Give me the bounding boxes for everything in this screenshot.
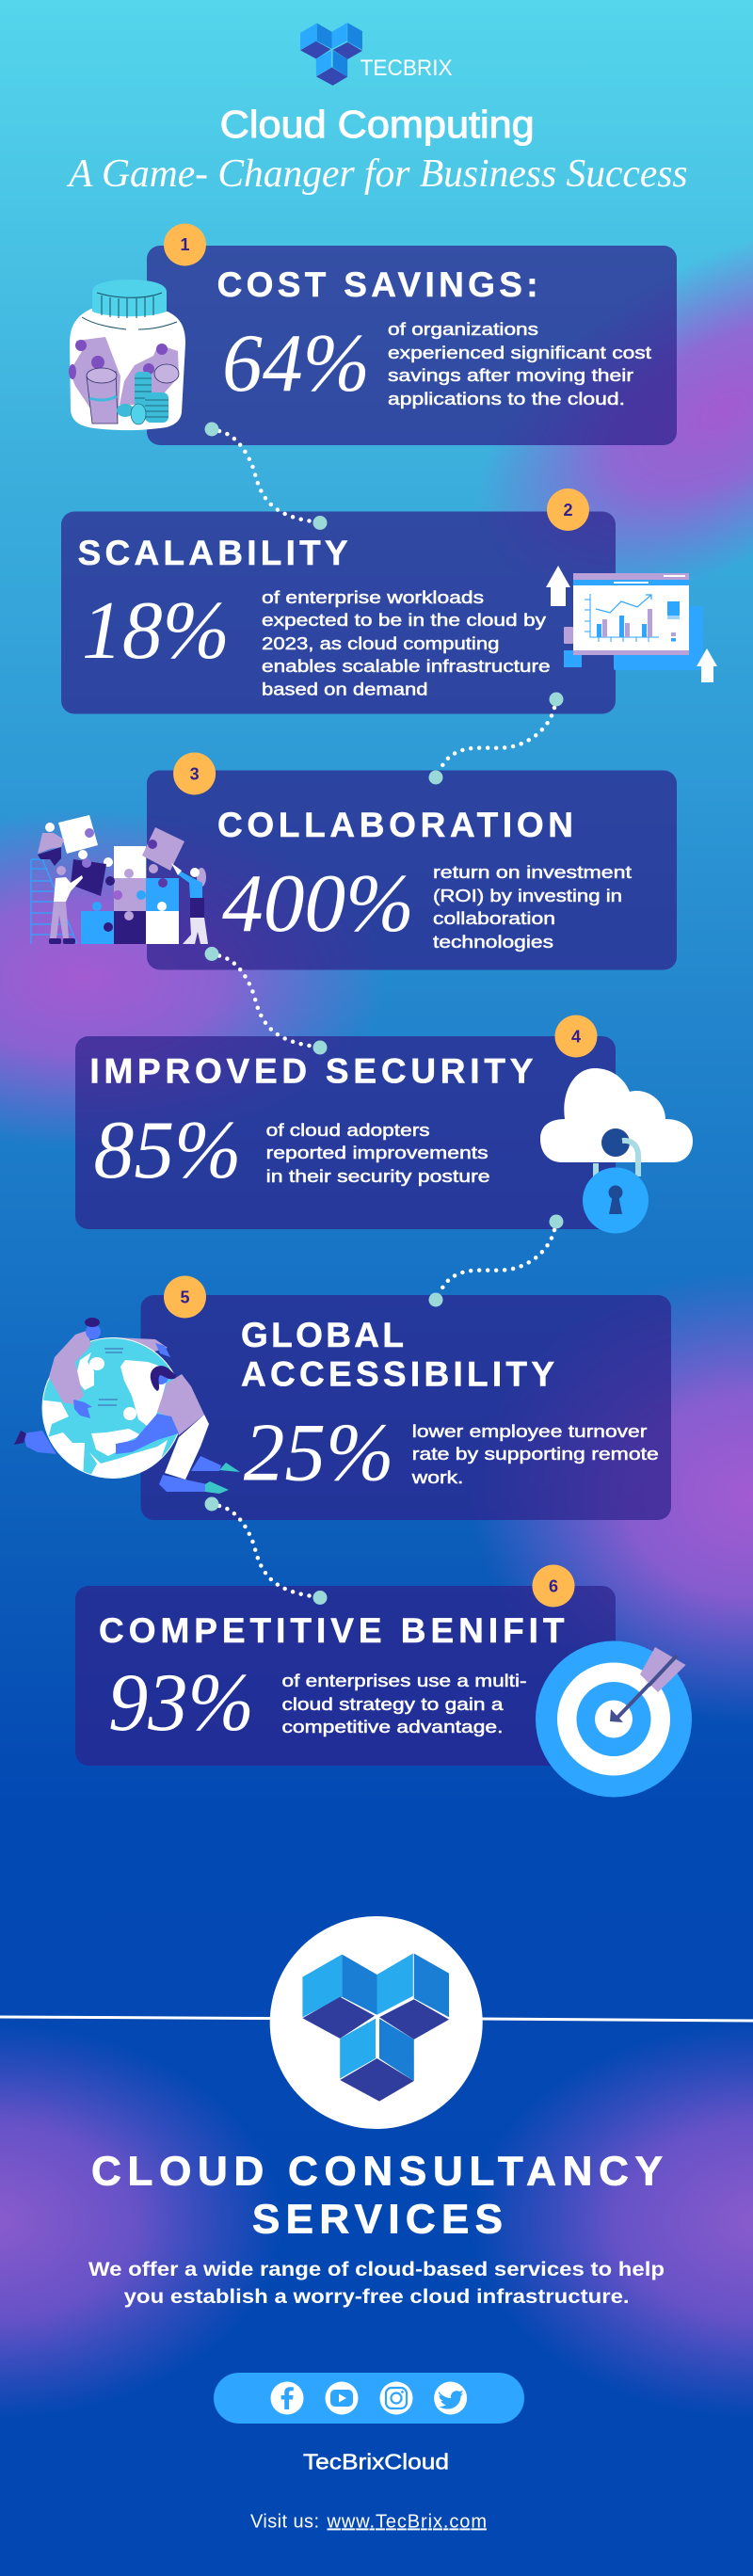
description: savings after moving their bbox=[388, 366, 633, 385]
heading: SCALABILITY bbox=[78, 534, 348, 572]
badge 4 bbox=[555, 1015, 597, 1058]
description bbox=[266, 1121, 490, 1186]
footer divider left bbox=[0, 2017, 273, 2018]
badge 1: 1 bbox=[180, 235, 190, 254]
panel: cost savings bbox=[147, 246, 677, 445]
icon: target with arrow bbox=[536, 1641, 692, 1798]
social pill bbox=[214, 2373, 524, 2424]
brand name: TECBRIX bbox=[360, 56, 453, 81]
badge 5: 5 bbox=[180, 1288, 190, 1306]
description: technologies bbox=[433, 933, 553, 952]
description: of enterprises use a multi- bbox=[282, 1672, 527, 1690]
heading: GLOBAL bbox=[241, 1316, 404, 1354]
description: based on demand bbox=[262, 680, 427, 698]
badge 2: 2 bbox=[563, 501, 573, 520]
description: (ROI) by investing in bbox=[433, 887, 622, 905]
description: of organizations bbox=[388, 320, 538, 339]
icon: facebook bbox=[271, 2381, 303, 2415]
footer logo badge bbox=[270, 1916, 483, 2129]
icon: twitter bbox=[434, 2381, 467, 2415]
header logo bbox=[300, 23, 362, 86]
footer heading: CLOUD CONSULTANCY bbox=[91, 2148, 663, 2195]
stat: 18% bbox=[82, 585, 230, 677]
visit line: Visit us: bbox=[250, 2511, 319, 2532]
footer divider right bbox=[480, 2019, 753, 2021]
footer heading: SERVICES bbox=[252, 2197, 503, 2243]
description bbox=[262, 588, 551, 698]
heading: IMPROVED SECURITY bbox=[89, 1052, 534, 1091]
heading: COST SAVINGS: bbox=[217, 265, 538, 304]
description: in their security posture bbox=[266, 1167, 490, 1186]
description: competitive advantage. bbox=[282, 1718, 503, 1736]
heading: COLLABORATION bbox=[217, 806, 573, 844]
stat: 64% bbox=[222, 318, 370, 409]
icon: jar of savings bbox=[69, 280, 185, 430]
footer description: We offer a wide range of cloud-based services to help bbox=[88, 2259, 665, 2280]
badge 6 bbox=[533, 1564, 574, 1608]
description: work. bbox=[411, 1468, 463, 1487]
stat: 25% bbox=[244, 1408, 394, 1499]
badge 3 bbox=[173, 753, 216, 794]
panel: collaboration bbox=[147, 770, 677, 969]
description: rate by supporting remote bbox=[412, 1445, 659, 1464]
title: Cloud Computing bbox=[220, 103, 535, 146]
connector 1 bbox=[205, 422, 328, 530]
panel: global accessibility bbox=[141, 1295, 671, 1520]
footer description bbox=[88, 2259, 665, 2308]
description: enables scalable infrastructure bbox=[262, 657, 551, 676]
badge 2 bbox=[547, 488, 589, 531]
heading: COMPETITIVE BENIFIT bbox=[99, 1611, 565, 1650]
description: of enterprise workloads bbox=[262, 588, 484, 607]
description: experienced significant cost bbox=[388, 344, 651, 362]
description bbox=[388, 320, 651, 408]
panel: improved security bbox=[75, 1036, 616, 1229]
icon: instagram bbox=[380, 2381, 412, 2415]
description: expected to be in the cloud by bbox=[262, 611, 546, 630]
social handle: TecBrixCloud bbox=[303, 2450, 449, 2474]
description: lower employee turnover bbox=[412, 1422, 647, 1441]
badge 6: 6 bbox=[549, 1577, 558, 1596]
visit line: www.TecBrix.com bbox=[326, 2511, 487, 2532]
icon: analytics window bbox=[546, 566, 717, 682]
panel: competitive benefit bbox=[75, 1586, 616, 1766]
connector 4 bbox=[429, 1214, 563, 1306]
connector 5 bbox=[205, 1496, 328, 1605]
footer heading bbox=[91, 2148, 663, 2243]
description: 2023, as cloud computing bbox=[262, 634, 499, 653]
badge 1 bbox=[164, 224, 206, 265]
connector 3 bbox=[205, 947, 328, 1054]
connector 2 bbox=[429, 693, 563, 785]
stat: 93% bbox=[108, 1657, 254, 1749]
description: collaboration bbox=[433, 909, 555, 928]
icon: youtube bbox=[326, 2381, 358, 2415]
visit line bbox=[250, 2511, 487, 2532]
heading: ACCESSIBILITY bbox=[241, 1355, 554, 1394]
description: cloud strategy to gain a bbox=[282, 1695, 505, 1714]
panel: scalability bbox=[61, 512, 616, 713]
footer description: you establish a worry-free cloud infrastructure. bbox=[124, 2286, 630, 2308]
description: return on investment bbox=[433, 863, 632, 882]
description bbox=[433, 863, 632, 952]
icon: cloud with padlock bbox=[540, 1068, 693, 1233]
subtitle: A Game- Changer for Business Success bbox=[66, 152, 688, 196]
stat: 85% bbox=[94, 1105, 241, 1196]
badge 5 bbox=[164, 1276, 206, 1318]
heading bbox=[241, 1316, 554, 1394]
badge 4: 4 bbox=[571, 1028, 581, 1047]
stat: 400% bbox=[222, 858, 414, 950]
badge 3: 3 bbox=[190, 764, 200, 783]
description: applications to the cloud. bbox=[388, 390, 625, 408]
icon: globe with people bbox=[14, 1318, 240, 1494]
description bbox=[411, 1422, 659, 1487]
icon: puzzle team bbox=[31, 815, 208, 944]
description bbox=[282, 1672, 527, 1736]
description: of cloud adopters bbox=[266, 1121, 430, 1140]
description: reported improvements bbox=[266, 1144, 489, 1162]
